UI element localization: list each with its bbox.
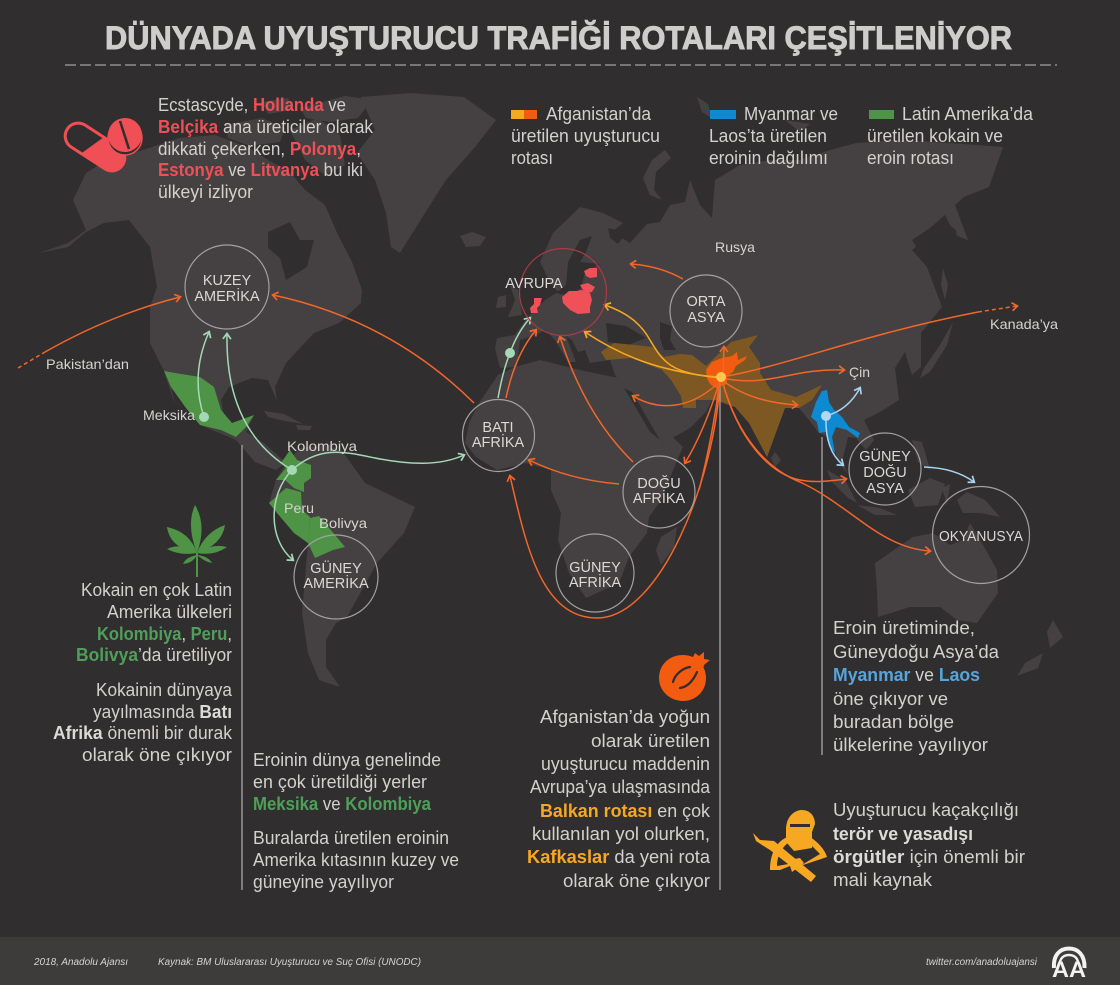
circle: Southeast Asia: GÜNEY	[859, 447, 911, 465]
legend: Latin America	[867, 104, 1034, 168]
label: Colombia: Kolombiya	[287, 438, 357, 454]
text: ecstasy	[158, 95, 374, 202]
text: Afghanistan: uyuşturucu maddenin	[541, 754, 710, 774]
icon: masked fighter	[753, 810, 827, 882]
route: Caucasus to Europe	[605, 305, 720, 377]
footer: twitter: twitter.com/anadoluajansi	[926, 957, 1038, 968]
route: Afghanistan to Southeast Asia	[722, 380, 846, 482]
text: terror financing: Uyuşturucu kaçakçılığı	[833, 800, 1019, 820]
Novaya Zemlya and Arctic islands	[643, 97, 810, 200]
text: Afghanistan: Afganistan’da yoğun	[540, 707, 710, 727]
dot: Myanmar	[821, 411, 831, 421]
label: China: Çin	[849, 364, 870, 380]
text: heroin spread: güneyine yayılıyor	[253, 872, 394, 892]
Australia	[875, 523, 998, 623]
circle: Oceania	[932, 486, 1030, 584]
world map landmass	[39, 93, 1063, 687]
South America	[269, 445, 415, 687]
route: Afghanistan to Canada	[722, 312, 978, 377]
text: Afghanistan: olarak üretilen	[591, 731, 710, 751]
region: Estonia	[584, 268, 597, 278]
text: terror financing: örgütler için önemli bir	[833, 847, 1025, 867]
label: Bolivia: Bolivya	[319, 515, 367, 531]
text: West Africa	[53, 680, 233, 765]
route: Afghanistan to India east	[722, 380, 797, 405]
region: Mexico	[164, 371, 254, 437]
circle: South Africa	[556, 534, 634, 612]
route: Afghanistan to Central Asia	[723, 347, 724, 375]
logo: Anadolu Agency	[1052, 948, 1086, 982]
vertical rule: left column	[241, 445, 243, 890]
route: Mexico to North America	[198, 332, 209, 417]
text: heroin production: en çok üretildiği yerler	[253, 772, 427, 792]
text: terror financing: mali kaynak	[833, 870, 933, 890]
circle: Europe: AVRUPA	[505, 276, 563, 292]
vertical rule: Afghanistan text	[719, 384, 721, 890]
label: Peru: Peru	[284, 500, 314, 516]
title: DÜNYADA UYUŞTURUCU TRAFİĞİ ROTALARI ÇEŞİTLENİYOR	[105, 20, 1012, 56]
Caspian Sea	[660, 322, 676, 350]
circle: East Africa: AFRİKA	[633, 489, 686, 507]
circle: South America	[294, 535, 378, 619]
Black Sea	[606, 323, 646, 345]
text: cocaine in Latin America: Bolivya’da üretiliyor	[76, 645, 232, 665]
route: East Africa to West Africa	[529, 460, 619, 484]
text: West Africa: Kokainin dünyaya	[96, 680, 233, 700]
legend: Myanmar and Laos	[709, 104, 838, 168]
route: Southeast Asia to Oceania	[924, 467, 974, 482]
region: Netherlands and Belgium	[530, 298, 542, 313]
text: ecstasy: Estonya ve Litvanya bu iki	[158, 160, 363, 180]
text: terror financing	[833, 800, 1025, 890]
text: ecstasy: Ecstascyde, Hollanda ve	[158, 95, 346, 115]
circle: Southeast Asia	[849, 433, 921, 505]
label: Russia: Rusya	[715, 239, 755, 255]
circle: West Africa	[462, 400, 534, 472]
region: Afghanistan	[706, 352, 747, 388]
route: Afghanistan around South Africa to West Africa	[510, 380, 720, 618]
route: East Africa to Europe	[560, 337, 633, 462]
text: heroin production	[253, 750, 441, 814]
text: Southeast Asia heroin: Eroin üretiminde,	[833, 618, 975, 638]
legend: Myanmar and Laos: Myanmar ve	[744, 104, 838, 124]
circle: Central Asia	[670, 275, 742, 347]
legend: Afghanistan: Afganistan’da	[546, 104, 652, 124]
label: Pakistan: Pakistan’dan	[46, 356, 129, 372]
text: Afghanistan: kullanılan yol olurken,	[532, 824, 710, 844]
Canadian Arctic islands	[225, 96, 372, 175]
dot: Colombia	[287, 465, 297, 475]
circle: Southeast Asia: ASYA	[866, 481, 904, 497]
text: West Africa: olarak öne çıkıyor	[82, 745, 232, 765]
yellow routes	[585, 305, 720, 378]
Iceland	[460, 232, 486, 247]
Japan and Sakhalin	[920, 268, 953, 378]
logo: Anadolu Agency: AA	[1052, 957, 1086, 982]
region: Poland	[562, 290, 592, 314]
Hudson Bay	[268, 222, 314, 280]
icon: pill and tablet	[60, 118, 142, 176]
icon: poppy	[659, 652, 710, 701]
circle: South America: GÜNEY	[310, 559, 362, 577]
route: Afghanistan to Arabia	[633, 385, 716, 406]
label: Canada: Kanada’ya	[990, 316, 1058, 332]
route: Afghanistan to East Africa	[685, 380, 720, 463]
icon: cannabis leaf	[167, 505, 227, 577]
route: West Africa to Europe	[498, 318, 530, 398]
circle: South America: AMERİKA	[303, 574, 369, 592]
text: West Africa: Afrika önemli bir durak	[53, 723, 233, 743]
text: Southeast Asia heroin: Güneydoğu Asya’da	[833, 642, 1000, 662]
text: terror financing: terör ve yasadışı	[833, 824, 973, 844]
route: Balkan to Europe	[585, 332, 720, 378]
region: Peru	[269, 488, 310, 543]
circle: Oceania: OKYANUSYA	[939, 529, 1023, 545]
circle: North America: KUZEY	[203, 273, 251, 289]
text: Afghanistan: Kafkaslar da yeni rota	[527, 847, 711, 867]
text: Afghanistan	[527, 707, 711, 891]
region: Colombia	[276, 450, 311, 492]
green routes	[198, 318, 530, 560]
route: Afghanistan to East Africa inner	[699, 380, 720, 490]
route: from Pakistan to North America	[45, 297, 180, 352]
circle: South Africa: AFRİKA	[569, 573, 622, 591]
circle: Central Asia: ORTA	[687, 294, 726, 310]
text: cocaine in Latin America	[76, 580, 232, 665]
text: ecstasy: Belçika ana üreticiler olarak	[158, 117, 374, 137]
dot: Mexico	[199, 412, 209, 422]
text: Afghanistan: Avrupa’ya ulaşmasında	[530, 777, 711, 797]
dot: Spain	[505, 348, 515, 358]
Caribbean islands	[264, 411, 312, 430]
Baltic Sea	[556, 236, 600, 296]
orange routes	[18, 264, 1017, 618]
region: Afghan route countries	[601, 335, 822, 457]
New Zealand	[1017, 620, 1063, 676]
text: heroin spread	[253, 828, 459, 892]
route: Myanmar to Southeast Asia	[826, 418, 843, 465]
circle: Europe	[505, 248, 606, 336]
text: Southeast Asia heroin: öne çıkıyor ve	[833, 689, 948, 709]
inland seas	[268, 222, 960, 446]
legend: Myanmar and Laos: Laos’ta üretilen	[709, 126, 827, 146]
route: Myanmar to China	[826, 388, 860, 416]
vertical rule: Southeast Asia text	[821, 437, 823, 755]
text: Afghanistan: Balkan rotası en çok	[540, 801, 711, 821]
dot: Afghanistan	[716, 372, 726, 382]
circle: East Africa: DOĞU	[637, 475, 681, 492]
circle: East Africa	[623, 456, 695, 528]
circle: Southeast Asia: DOĞU	[863, 464, 907, 481]
route: Afghanistan to China	[722, 370, 844, 381]
Africa	[465, 360, 683, 598]
legend: Afghanistan: rotası	[511, 148, 553, 168]
footer: agency credit: 2018, Anadolu Ajansı	[33, 957, 128, 968]
legend: Latin America: eroin rotası	[867, 148, 954, 168]
Red Sea	[624, 388, 668, 446]
route: Afghanistan to Oceania	[722, 380, 930, 551]
Persian Gulf	[671, 377, 706, 402]
route: West Africa to Europe	[506, 330, 536, 398]
text: Southeast Asia heroin	[833, 618, 1000, 755]
circle: West Africa: BATI	[482, 420, 514, 436]
region: Bolivia	[308, 516, 345, 558]
circle: North America: AMERİKA	[194, 287, 260, 305]
blue routes	[826, 388, 974, 482]
text: ecstasy: ülkeyi izliyor	[158, 182, 253, 202]
North America	[39, 135, 362, 470]
legend: Myanmar and Laos: eroinin dağılımı	[709, 148, 828, 168]
Greenland	[357, 93, 496, 253]
Eurasia and Arabia	[495, 140, 1003, 474]
Madagascar	[656, 527, 677, 565]
circle: South Africa: GÜNEY	[569, 558, 621, 576]
Southeast Asia islands	[827, 440, 950, 515]
route: dashed end to Canada	[978, 306, 1017, 312]
route: Central Asia to Russia	[631, 264, 683, 279]
text: West Africa: yayılmasında Batı	[93, 702, 232, 722]
text: Southeast Asia heroin: Myanmar ve Laos	[833, 665, 980, 685]
legend: Latin America: üretilen kokain ve	[867, 126, 1003, 146]
New Guinea	[957, 492, 1000, 517]
text: cocaine in Latin America: Kokain en çok Latin	[81, 580, 232, 600]
Sri Lanka	[771, 452, 781, 467]
White Sea	[608, 228, 627, 244]
text: heroin spread: Buralarda üretilen eroinin	[253, 828, 449, 848]
text: heroin spread: Amerika kıtasının kuzey ve	[253, 850, 459, 870]
text: heroin production: Meksika ve Kolombiya	[253, 794, 432, 814]
legend: Afghanistan: üretilen uyuşturucu	[511, 126, 660, 146]
text: Afghanistan: olarak öne çıkıyor	[563, 871, 710, 891]
place labels	[46, 239, 1058, 531]
label: Mexico: Meksika	[143, 407, 195, 423]
footer	[0, 937, 1120, 985]
region: Lithuania	[580, 283, 595, 293]
route: Colombia to South America	[274, 470, 293, 560]
text: Southeast Asia heroin: buradan bölge	[833, 712, 954, 732]
British Isles	[496, 285, 522, 317]
footer: source: Kaynak: BM Uluslararası Uyuşturucu ve Suç Ofisi (UNODC)	[158, 957, 421, 968]
route: dashed start from Pakistan	[18, 352, 45, 368]
circle: Central Asia: ASYA	[687, 310, 725, 326]
route: Colombia to West Africa	[292, 452, 464, 470]
text: Southeast Asia heroin: ülkelerine yayılıyor	[833, 735, 988, 755]
text: ecstasy: dikkati çekerken, Polonya,	[158, 139, 361, 159]
circle: North America	[185, 245, 269, 329]
circle: West Africa: AFRİKA	[472, 433, 525, 451]
text: cocaine in Latin America: Kolombiya, Peru,	[97, 624, 232, 644]
route: Colombia to North America	[227, 334, 292, 470]
Okhotsk Sea	[912, 222, 960, 268]
text: heroin production: Eroinin dünya genelinde	[253, 750, 441, 770]
legend: Afghanistan	[511, 104, 660, 168]
title underline	[65, 64, 1057, 66]
region: Myanmar and Laos	[811, 390, 860, 453]
text: cocaine in Latin America: Amerika ülkeleri	[107, 602, 232, 622]
legend: Latin America: Latin Amerika’da	[902, 104, 1034, 124]
route: West Africa to North America	[273, 295, 474, 403]
